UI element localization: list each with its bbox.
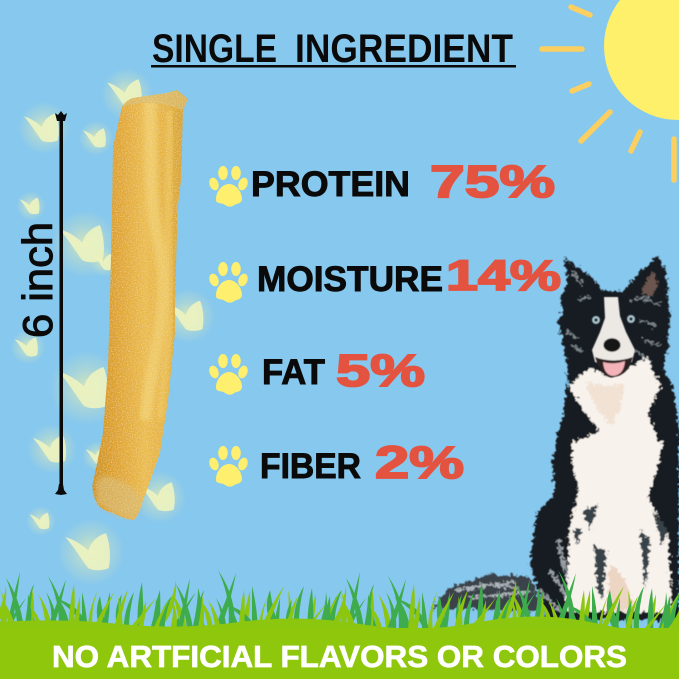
dog inner ear (641, 272, 658, 297)
dog mouth and tongue (595, 357, 633, 377)
nutrient row: protein 75%: PROTEIN (251, 165, 410, 204)
nutrient row: fat 5%: 5% (336, 345, 425, 396)
footer text: NO ARTFICIAL FLAVORS OR COLORS (52, 639, 627, 674)
dog eyes (592, 315, 635, 324)
dog pupils (594, 317, 633, 322)
dog nose (604, 338, 620, 352)
6 inch measurement ruler: 6 inch (14, 222, 61, 338)
dog face blaze and muzzle (592, 297, 635, 368)
nutrient row: fiber 2%: 2% (375, 437, 464, 488)
dog leg shadows (572, 505, 668, 600)
dog head grey fur flecks (566, 270, 660, 362)
icon: paw print (208, 262, 249, 303)
dog tail (432, 574, 545, 612)
dog flank grey fur (540, 540, 575, 612)
dog black body and head (530, 255, 679, 620)
nutrient row: fiber 2%: FIBER (260, 447, 361, 486)
sun with rays (542, 0, 679, 180)
nutrient row: fat 5%: FAT (262, 353, 325, 392)
nutrient row: protein 75%: 75% (430, 156, 555, 207)
dog white chest and legs (566, 357, 672, 612)
icon: paw print (208, 354, 249, 395)
icon: paw print (208, 166, 249, 207)
nutrient row: moisture 14%: 14% (446, 252, 561, 300)
dog face (592, 297, 635, 377)
icon: paw print (208, 446, 249, 487)
grass strip (0, 570, 679, 636)
title: single ingredient: INGREDIENT (295, 27, 513, 71)
title: single ingredient: SINGLE (152, 27, 277, 71)
nutrient row: moisture 14%: MOISTURE (257, 260, 443, 299)
green footer band (0, 628, 679, 679)
nutrient row: fat 5% (208, 345, 425, 396)
border collie dog (432, 255, 679, 620)
nutrient row: fiber 2% (208, 437, 464, 488)
6 inch measurement ruler (14, 111, 67, 495)
title: single ingredient (151, 27, 516, 71)
butterflies around the chew (10, 68, 216, 586)
bully stick chew (92, 90, 188, 520)
nutrient row: moisture 14% (208, 252, 561, 303)
dog chest peach shading (585, 380, 623, 425)
nutrient row: protein 75% (208, 156, 555, 207)
